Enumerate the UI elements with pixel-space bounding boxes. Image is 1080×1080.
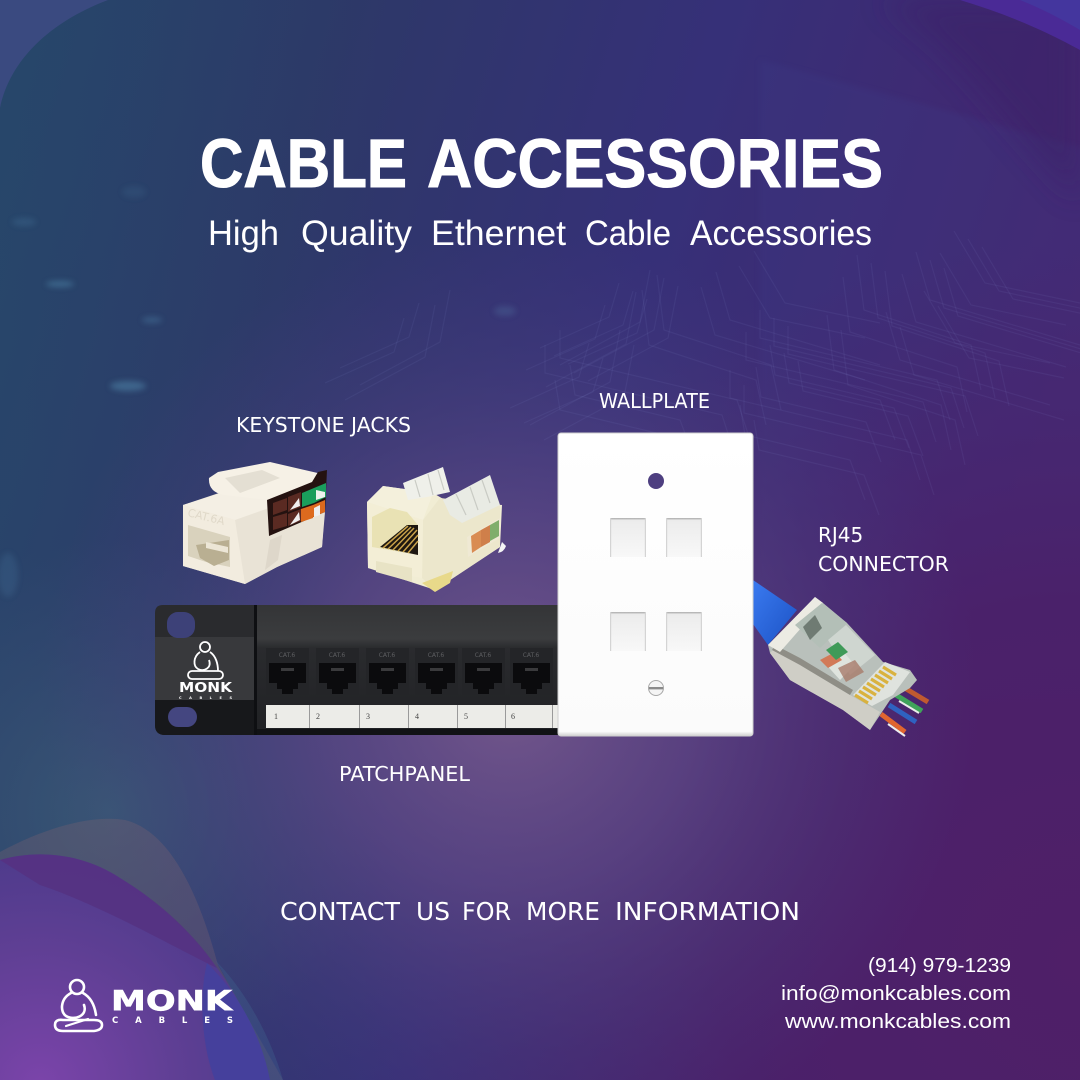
panel number strip: 3 — [366, 712, 370, 721]
call to action — [280, 897, 800, 926]
call to action: MORE — [526, 897, 600, 926]
logo icon — [55, 980, 102, 1031]
bottom screw — [648, 680, 664, 696]
subtitle: Cable — [585, 214, 671, 253]
panel number strip — [266, 705, 558, 728]
subtitle — [208, 214, 872, 253]
subtitle: High — [208, 214, 279, 253]
title — [200, 125, 883, 202]
top screw hole — [648, 473, 664, 489]
label: wallplate: WALLPLATE — [599, 389, 710, 413]
contact details: www.monkcables.com — [784, 1010, 1011, 1033]
keystone jack 1 — [183, 462, 327, 584]
subtitle: Ethernet — [431, 214, 566, 253]
panel number strip: 1 — [274, 712, 278, 721]
call to action: INFORMATION — [615, 897, 800, 926]
keystone jack 1: CAT.6A — [186, 506, 227, 528]
title: ACCESSORIES — [427, 125, 883, 202]
contact details — [781, 954, 1011, 1033]
logo tagline: CABLES — [112, 1016, 233, 1026]
title: CABLE — [200, 125, 407, 202]
patch panel — [155, 605, 558, 735]
contact details: (914) 979-1239 — [868, 954, 1011, 977]
panel number strip: 2 — [316, 712, 320, 721]
call to action: FOR — [462, 897, 511, 926]
panel number strip: 5 — [464, 712, 468, 721]
panel mounting holes — [167, 612, 197, 727]
panel ports — [266, 648, 553, 695]
connector gold pins — [855, 667, 896, 703]
brand logo — [55, 980, 234, 1031]
label: keystone jacks: KEYSTONE JACKS — [236, 413, 411, 437]
RJ45 cable and connector — [753, 580, 928, 736]
keystone openings — [610, 518, 702, 651]
circuit traces — [325, 231, 1080, 515]
panel number strip: 4 — [415, 712, 419, 721]
jack 2 cavity — [372, 508, 418, 555]
logo wordmark: MONK — [111, 984, 234, 1017]
subtitle: Accessories — [690, 214, 872, 253]
keystone jack 2 — [367, 467, 506, 592]
wires — [881, 687, 928, 736]
call to action: US — [416, 897, 450, 926]
panel logo: CABLES — [179, 696, 232, 700]
subtitle: Quality — [301, 214, 413, 253]
label: RJ45 connector: RJ45 — [818, 523, 863, 547]
decorative corner waves — [0, 819, 283, 1080]
panel logo: MONK — [179, 681, 233, 696]
label: RJ45 connector: CONNECTOR — [818, 552, 949, 576]
call to action: CONTACT — [280, 897, 401, 926]
contact details: info@monkcables.com — [781, 982, 1011, 1005]
panel number strip: 6 — [511, 712, 515, 721]
panel logo — [179, 642, 233, 700]
wallplate — [558, 433, 753, 736]
label: patchpanel: PATCHPANEL — [339, 762, 471, 786]
